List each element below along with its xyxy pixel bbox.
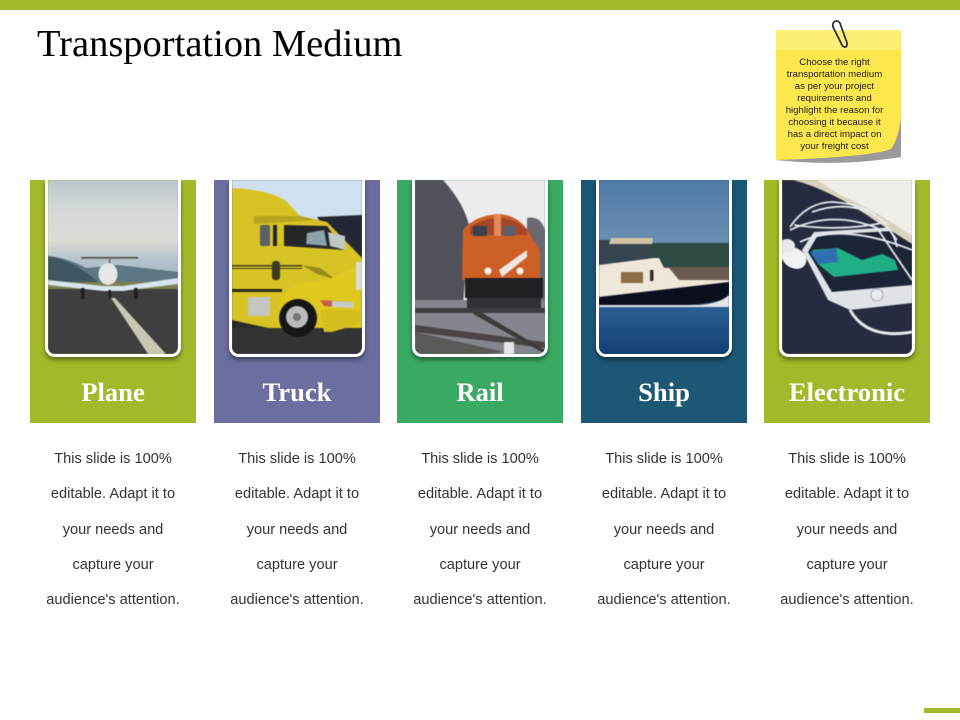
text block: ship: audience's attention. <box>597 592 731 608</box>
top accent bar <box>0 0 960 10</box>
text block: rail <box>413 451 547 608</box>
text block: ship: capture your <box>623 557 705 573</box>
panel label: Electronic <box>789 377 905 407</box>
text block: rail: capture your <box>439 557 521 573</box>
photo: yellow truck <box>229 180 365 357</box>
photo: plane on runway <box>45 180 181 357</box>
text block: plane: editable. Adapt it to <box>51 486 175 502</box>
text block: rail: audience's attention. <box>413 592 547 608</box>
text block: ship: your needs and <box>614 522 714 538</box>
note text: your freight cost <box>800 141 869 152</box>
text block: electronic: your needs and <box>797 522 897 538</box>
text block: ship: This slide is 100% <box>605 451 723 467</box>
text block: truck: editable. Adapt it to <box>235 486 359 502</box>
photo: motor yacht <box>596 180 732 357</box>
note text: requirements and <box>797 93 872 104</box>
text block: truck: This slide is 100% <box>238 451 356 467</box>
panel: truck <box>214 180 380 423</box>
text block: electronic: editable. Adapt it to <box>785 486 909 502</box>
text block: plane: your needs and <box>63 522 163 538</box>
note text: choosing it because it <box>788 117 881 128</box>
note text: transportation medium <box>787 69 882 80</box>
text block: electronic: audience's attention. <box>780 592 914 608</box>
note text: highlight the reason for <box>786 105 883 116</box>
text block: plane: capture your <box>72 557 154 573</box>
text block: plane: audience's attention. <box>46 592 180 608</box>
photo: orange locomotive <box>412 180 548 357</box>
text block: plane <box>46 451 180 608</box>
text block: ship <box>597 451 731 608</box>
panel: rail <box>397 180 563 423</box>
photo: phone with earphones <box>779 180 915 357</box>
sticky note <box>776 20 901 163</box>
note text: has a direct impact on <box>788 129 881 140</box>
text block: electronic <box>780 451 914 608</box>
text block: rail: This slide is 100% <box>421 451 539 467</box>
panel label: Rail <box>456 377 504 407</box>
note text: Choose the right <box>799 57 870 68</box>
text block: electronic: capture your <box>806 557 888 573</box>
text block: rail: editable. Adapt it to <box>418 486 542 502</box>
text block: ship: editable. Adapt it to <box>602 486 726 502</box>
panel: ship <box>581 180 747 423</box>
panel: electronic <box>764 180 930 423</box>
text block: truck: audience's attention. <box>230 592 364 608</box>
text block: electronic: This slide is 100% <box>788 451 906 467</box>
text block: truck: your needs and <box>247 522 347 538</box>
icon: paperclip <box>833 21 847 47</box>
panel label: Plane <box>81 377 145 407</box>
panel: plane <box>30 180 196 423</box>
title: Transportation Medium <box>37 23 402 65</box>
note text <box>786 57 884 152</box>
text block: rail: your needs and <box>430 522 530 538</box>
text block: truck <box>230 451 364 608</box>
text block: truck: capture your <box>256 557 338 573</box>
panel label: Ship <box>638 377 690 407</box>
footer accent bar <box>924 708 960 713</box>
text block: plane: This slide is 100% <box>54 451 172 467</box>
note text: as per your project <box>795 81 874 92</box>
panel label: Truck <box>263 377 331 407</box>
